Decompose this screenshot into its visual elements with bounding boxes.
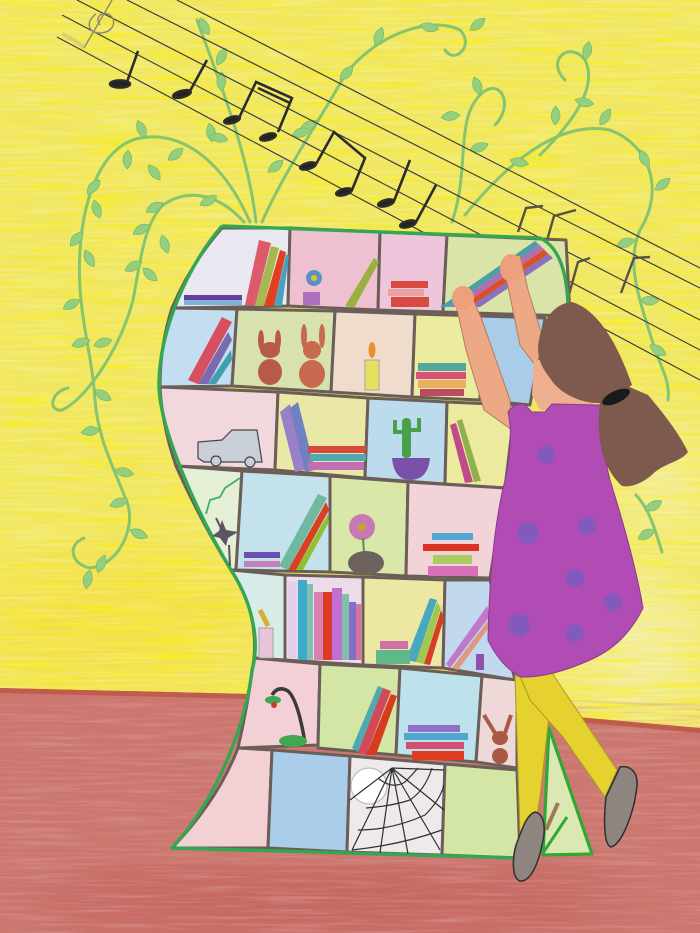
hair [538,302,632,403]
toy rabbit right [299,324,325,388]
toy rabbit small [484,715,511,764]
candle [365,342,379,390]
books row 4, wand, flower [206,478,479,576]
floor [0,688,700,933]
music notes [110,51,436,229]
wall background [0,0,700,730]
arms [455,255,545,430]
vines [53,16,673,590]
dress flowers [508,446,622,642]
hair tie [600,385,632,409]
book being pulled [440,241,553,307]
books row 2 and toys [188,317,466,396]
toy rabbit left [258,330,282,385]
books row 5 [259,580,490,670]
faint notes on the right [518,206,650,298]
music staff [57,0,700,380]
ponytail [599,385,688,486]
shelf cells [160,228,570,858]
green outline [159,226,568,858]
shoes [513,767,637,881]
girl [452,254,688,881]
treble clef [62,0,114,48]
legs [515,670,617,835]
neck [532,358,600,412]
toy car [198,430,262,467]
dress [488,404,643,677]
books row 3, car, cactus [198,402,481,483]
bookshelf vase [159,226,592,858]
hands [452,254,522,310]
spider web [350,768,444,854]
green corner [543,728,592,855]
flower pot [348,514,384,575]
cactus [392,418,430,480]
books row 6 and lamp [265,686,511,764]
books row 1 [184,240,429,308]
